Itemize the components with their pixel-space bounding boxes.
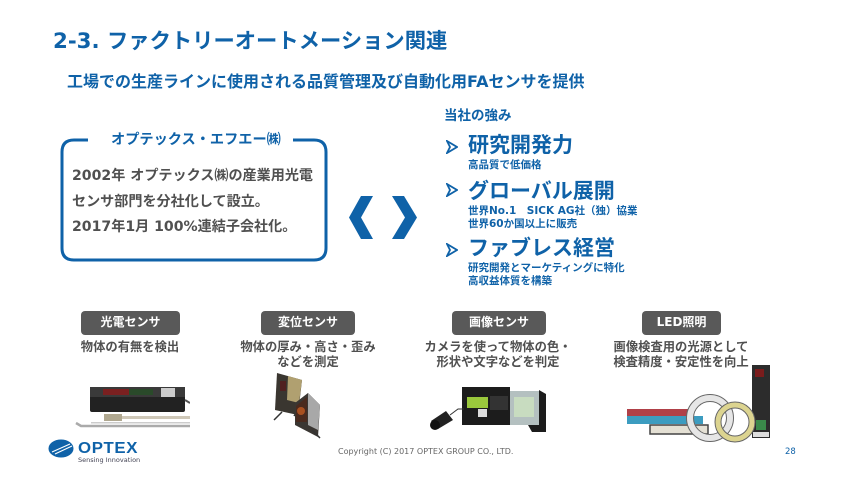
tag: LED lighting: LED照明	[657, 315, 706, 329]
strength 1 detail: 高品質で低価格	[468, 159, 542, 171]
strength 3 heading: ファブレス経営	[468, 236, 615, 260]
logo mark	[48, 440, 74, 458]
tag: displacement: 変位センサ	[278, 315, 338, 329]
box outline	[60, 138, 328, 262]
description: LED lighting: 検査精度・安定性を向上	[613, 355, 749, 369]
description: displacement: 物体の厚み・高さ・歪み	[240, 340, 376, 354]
page number: 28	[785, 447, 796, 457]
description: displacement: などを測定	[277, 355, 339, 369]
box body text: 2002年 オプテックス㈱の産業用光電	[72, 168, 313, 184]
copyright: Copyright (C) 2017 OPTEX GROUP CO., LTD.	[338, 447, 513, 456]
tag: image sensor	[452, 311, 546, 335]
icon: double chevrons	[349, 196, 417, 239]
tag: displacement	[261, 311, 355, 335]
strength 3	[446, 236, 625, 286]
strength 3 detail	[468, 262, 625, 286]
strength 2 detail: 世界60か国以上に販売	[468, 218, 577, 230]
strength 1	[446, 133, 573, 171]
tag: LED lighting	[642, 311, 721, 335]
logo tagline: Sensing Innovation	[78, 456, 140, 464]
logo wordmark: OPTEX	[78, 440, 138, 457]
description: image sensor: 形状や文字などを判定	[436, 355, 559, 369]
box body text	[72, 168, 313, 235]
image: displacement sensors	[274, 373, 320, 438]
bullet arrow	[446, 140, 458, 154]
bullet arrow	[446, 243, 458, 257]
description: image sensor: カメラを使って物体の色・	[425, 340, 571, 354]
description: LED lighting	[613, 340, 749, 369]
image: LED lights	[627, 365, 770, 442]
box body text: 2017年1月 100%連結子会社化。	[72, 219, 296, 235]
bullet arrow	[446, 183, 458, 197]
strength 2 detail: 世界No.1 SICK AG社（独）協業	[468, 205, 638, 217]
description: displacement	[240, 340, 376, 369]
strength 1 heading: 研究開発力	[468, 133, 573, 157]
tag: photoelectric	[81, 311, 180, 335]
strength 2 detail	[468, 205, 638, 230]
description: photoelectric: 物体の有無を検出	[81, 340, 179, 354]
strength 2 heading: グローバル展開	[468, 179, 615, 203]
box heading: オプテックス・エフエー㈱	[111, 132, 281, 148]
logo: OPTEX	[48, 440, 140, 464]
description: image sensor	[425, 340, 571, 369]
panel: company box	[60, 132, 328, 262]
title: 2-3. ファクトリーオートメーション関連	[53, 29, 447, 54]
strength 3 detail: 高収益体質を構築	[468, 274, 552, 286]
panel: strengths	[444, 108, 638, 286]
strengths heading: 当社の強み	[444, 108, 512, 124]
image: photoelectric sensor	[76, 387, 190, 428]
box body text: センサ部門を分社化して設立。	[72, 194, 269, 210]
strength 3 detail: 研究開発とマーケティングに特化	[468, 262, 625, 274]
tag: image sensor: 画像センサ	[469, 315, 529, 329]
description: LED lighting: 画像検査用の光源として	[614, 340, 748, 354]
image: vision sensor	[430, 387, 546, 432]
tag: photoelectric: 光電センサ	[100, 315, 160, 329]
strength 2	[446, 179, 638, 230]
subtitle: 工場での生産ラインに使用される品質管理及び自動化用FAセンサを提供	[67, 72, 584, 91]
